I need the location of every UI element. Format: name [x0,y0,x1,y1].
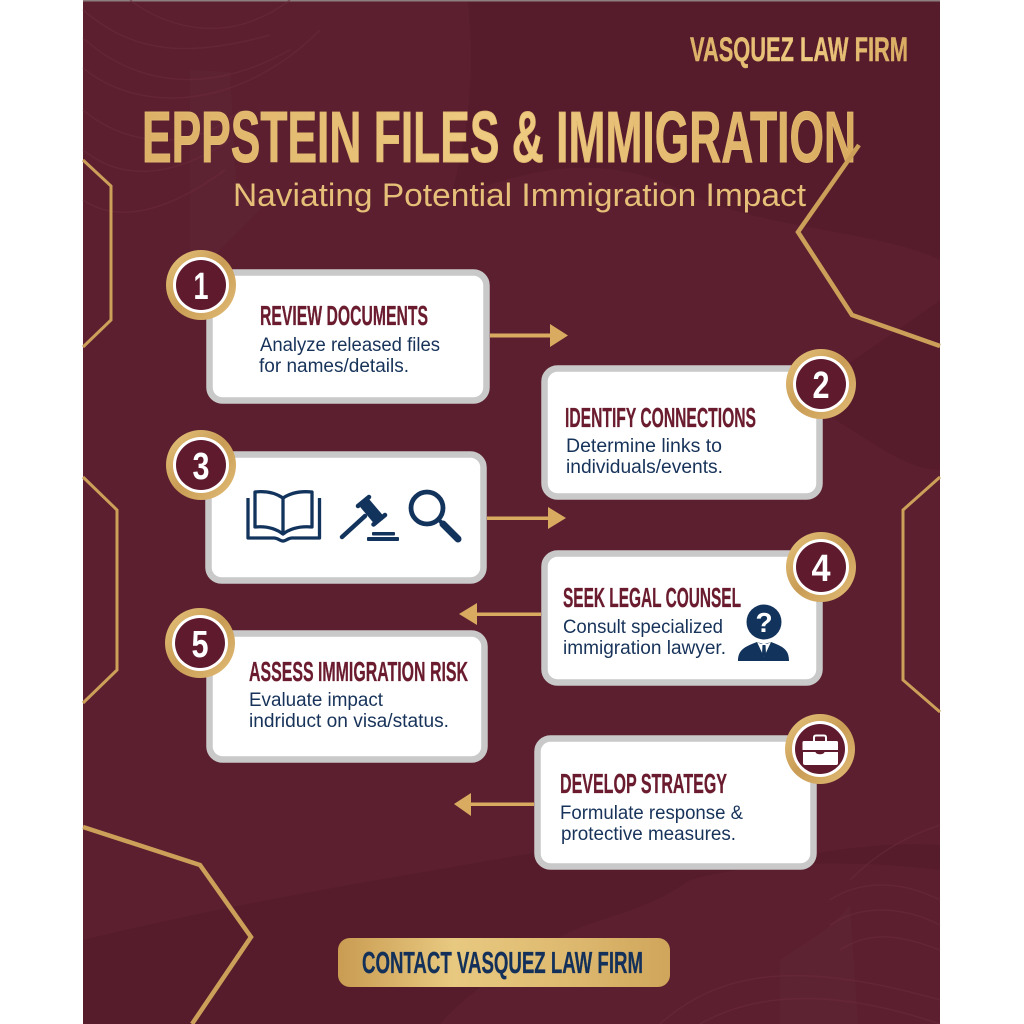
body text: Formulate response & [560,803,743,824]
badge: number 2: 2 [812,365,830,407]
heading: REVIEW DOCUMENTS [260,300,428,331]
body text [560,803,743,845]
badge: number 3 [166,430,236,500]
arrow: step 4 to step 5 [459,603,541,625]
icon: open book [248,492,320,541]
icon: person with question mark [738,604,789,661]
badge: number 4 [786,532,856,602]
body text: Evaluate impact [249,690,384,711]
badge: number 5: 5 [192,624,208,666]
heading: DEVELOP STRATEGY [560,768,727,799]
button: contact call to action [338,938,670,987]
body text: individuals/events. [566,457,723,478]
badge: number 3: 3 [192,446,210,488]
icon: magnifying glass [411,492,458,539]
icon: person with question mark: ? [755,607,773,638]
panel: step 4 seek legal counsel [544,532,856,682]
brand name: VASQUEZ LAW FIRM [690,31,908,69]
subtitle: Naviating Potential Immigration Impact [233,177,806,213]
badge: number 5 [165,608,235,678]
arrow: step 1 to step 2 [490,324,568,347]
body text [566,436,723,478]
decoration: gold outline top left [83,160,111,347]
body text [563,617,726,659]
badge: number 1: 1 [194,266,208,308]
body text: Determine links to [566,436,722,457]
decoration: gold outline top right [798,145,940,346]
badge: number 1 [166,250,236,320]
panel: step 3 icons [166,430,484,580]
body text [249,690,449,732]
body text: indriduct on visa/status. [249,711,449,732]
button: contact call to action: CONTACT VASQUEZ LAW FIRM [362,945,643,980]
decoration: gold outline bottom left [83,827,251,1024]
panel: step 5 assess immigration risk [165,608,484,760]
body text: Consult specialized [563,617,723,638]
badge: briefcase [785,714,855,784]
icon: briefcase [802,736,838,765]
panel: step 1 review documents [166,250,486,400]
heading: IDENTIFY CONNECTIONS [565,402,756,433]
decoration: gold outline middle left [83,477,117,703]
heading: ASSESS IMMIGRATION RISK [249,656,468,687]
body text [259,335,440,377]
body text: for names/details. [259,356,409,377]
arrow: step 3 to step 4 [487,507,566,529]
panel: step 2 identify connections [544,349,856,496]
badge: number 2 [786,349,856,419]
icon: gavel [342,497,399,541]
heading: SEEK LEGAL COUNSEL [563,582,741,613]
body text: immigration lawyer. [563,638,726,659]
badge: number 4: 4 [812,548,830,590]
body text: Analyze released files [260,335,440,356]
decoration: gold outline middle right [903,477,940,712]
body text: protective measures. [561,824,736,845]
arrow: step 6 onward [454,793,534,816]
panel: step 6 develop strategy [538,714,855,866]
